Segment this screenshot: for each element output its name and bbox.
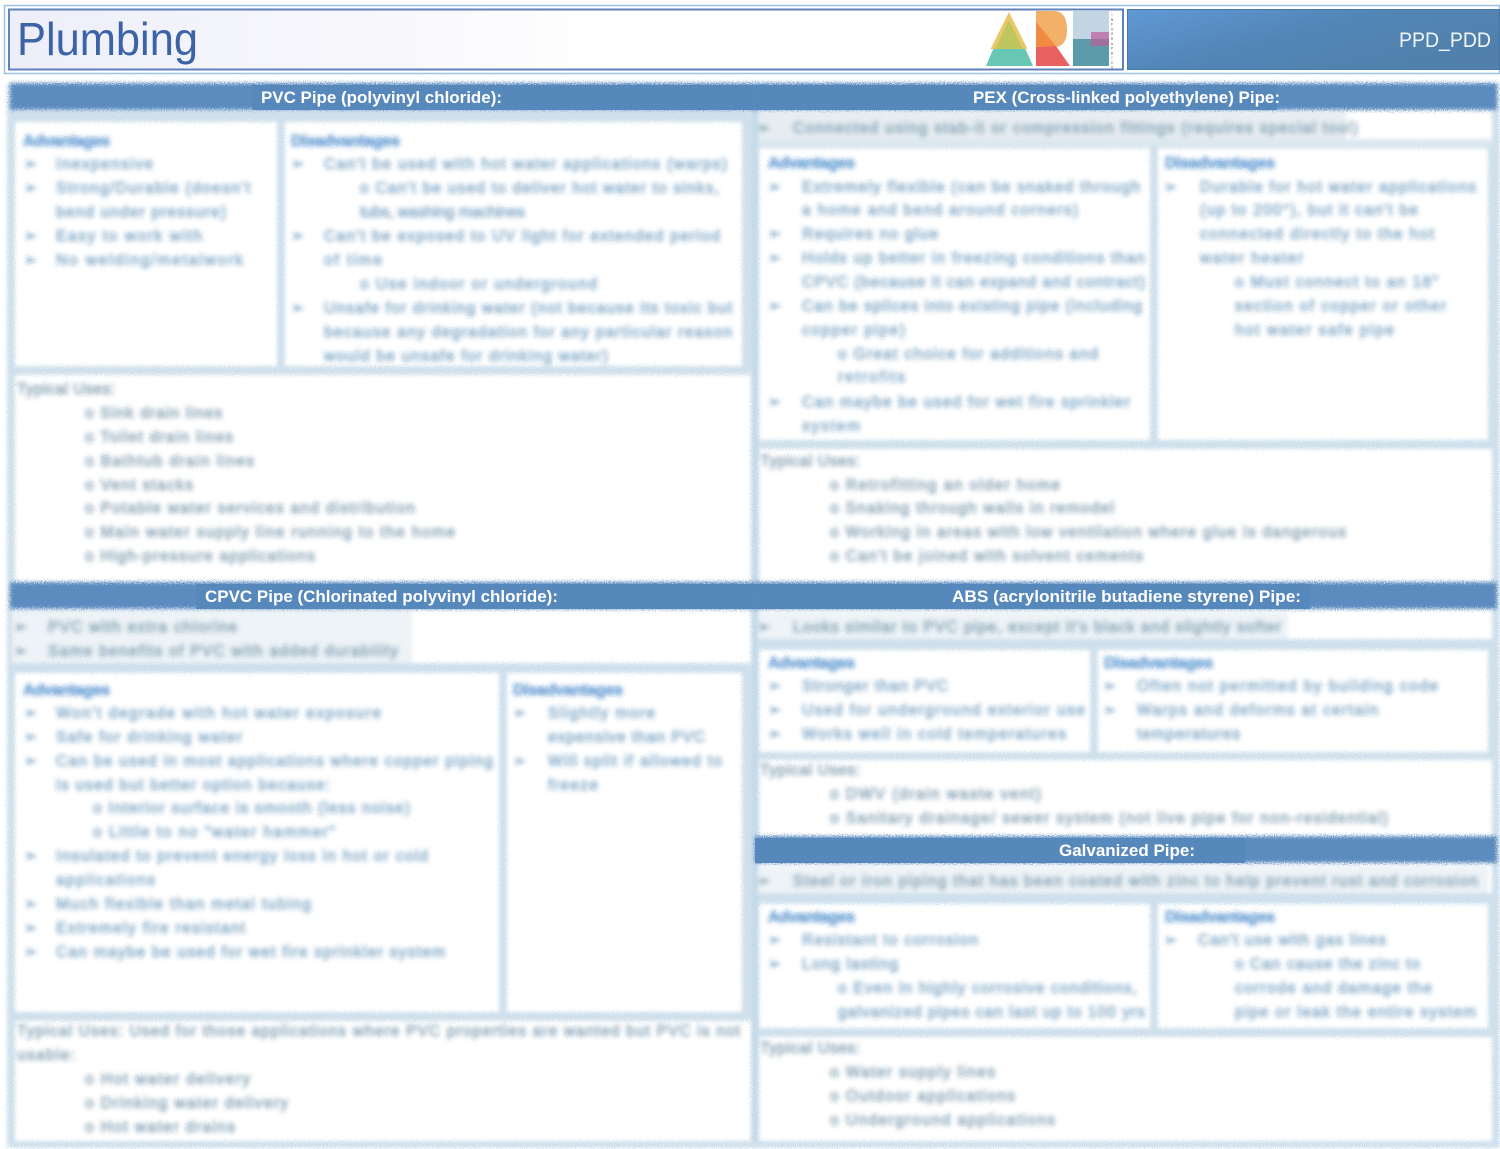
galvanized typical uses: o Water supply lines [830, 1064, 995, 1081]
PVC advantages: ➢ [24, 156, 37, 173]
heading: PEX pipe: PEX (Cross-linked polyethylene) Pipe: [973, 88, 1280, 107]
galvanized advantages: galvanized pipes can last up to 100 yrs [838, 1004, 1145, 1021]
CPVC disadvantages: ➢ [513, 705, 526, 722]
PVC typical uses: o High-pressure applications [85, 548, 315, 565]
CPVC typical uses: usable: [17, 1047, 75, 1064]
PEX disadvantages: Durable for hot water applications [1200, 179, 1476, 196]
CPVC typical uses: o Hot water drains [85, 1119, 235, 1136]
PVC advantages: Easy to work with [56, 228, 202, 245]
PVC advantages: Inexpensive [56, 156, 153, 173]
galvanized typical uses: o Outdoor applications [830, 1088, 1015, 1105]
galvanized disadvantages: Disadvantages [1165, 909, 1275, 926]
panel: PVC pipe [10, 83, 755, 565]
PEX advantages: o Great choice for additions and [838, 346, 1098, 363]
title box: Plumbing [17, 13, 198, 65]
galvanized typical uses: o Underground applications [830, 1112, 1055, 1129]
galvanized advantages: Advantages [768, 909, 855, 926]
PEX advantages: ➢ [768, 179, 781, 196]
PEX advantages: Can maybe be used for wet fire sprinkler [802, 394, 1130, 411]
galvanized disadvantages: ➢ [1164, 932, 1177, 949]
PEX advantages: Holds up better in freezing conditions than [802, 250, 1145, 267]
CPVC advantages: applications [56, 872, 155, 889]
PEX advantages: Advantages [768, 155, 855, 172]
CPVC advantages: ➢ [24, 848, 37, 865]
CPVC intro: ➢ [14, 643, 27, 660]
PVC disadvantages [291, 133, 733, 365]
heading: galvanized pipe: Galvanized Pipe: [1059, 841, 1195, 860]
title box [9, 10, 1123, 70]
PVC advantages: ➢ [24, 180, 37, 197]
ABS intro: ➢ [757, 619, 770, 636]
CPVC advantages: ➢ [24, 896, 37, 913]
PEX intro: Connected using stab-it or compression fittings (requires special tool) [793, 120, 1358, 137]
PEX advantages: ➢ [768, 394, 781, 411]
panel: PEX pipe [755, 83, 1497, 565]
PVC disadvantages: o Can't be used to deliver hot water to sinks, [360, 180, 719, 197]
CPVC intro: Same benefits of PVC with added durability [48, 643, 398, 660]
galvanized disadvantages [1164, 909, 1476, 1021]
ABS advantages [768, 655, 1085, 743]
heading: CPVC pipe [10, 582, 755, 609]
PVC advantages: ➢ [24, 252, 37, 269]
page header [4, 6, 1500, 74]
PVC advantages: Advantages [23, 133, 110, 150]
category box [1128, 10, 1500, 70]
ABS advantages: ➢ [768, 726, 781, 743]
galvanized advantages: Resistant to corrosion [802, 932, 978, 949]
CPVC advantages: Extremely fire resistant [56, 920, 246, 937]
galvanized typical uses [760, 1040, 1055, 1129]
heading: PVC pipe: PVC Pipe (polyvinyl chloride): [261, 88, 502, 107]
ABS advantages: ➢ [768, 702, 781, 719]
PVC disadvantages: Unsafe for drinking water (not because its toxic but [324, 300, 733, 317]
PEX disadvantages: hot water safe pipe [1235, 322, 1394, 339]
PVC advantages [23, 133, 251, 269]
logo: INFOGRAPHICS [1110, 13, 1114, 71]
PEX typical uses: o Working in areas with low ventilation where glue is dangerous [830, 524, 1346, 541]
PVC advantages: bend under pressure) [56, 204, 226, 221]
heading: galvanized pipe [755, 836, 1497, 863]
galvanized advantages: ➢ [768, 956, 781, 973]
PEX disadvantages: ➢ [1164, 179, 1177, 196]
CPVC advantages: Safe for drinking water [56, 729, 242, 746]
CPVC advantages: ➢ [24, 920, 37, 937]
galvanized advantages [768, 909, 1145, 1021]
PEX typical uses: Typical Uses: [760, 453, 860, 470]
PVC typical uses: o Vent stacks [85, 477, 193, 494]
ABS disadvantages [1103, 655, 1438, 743]
PEX disadvantages: o Must connect to an 18" [1235, 274, 1438, 291]
PEX advantages: retrofits [838, 369, 905, 386]
CPVC advantages: o Interior surface is smooth (less noise) [93, 800, 410, 817]
heading: PEX pipe [755, 83, 1497, 110]
CPVC disadvantages: Slightly more [548, 705, 655, 722]
PEX advantages: a home and bend around corners) [802, 202, 1078, 219]
CPVC advantages: Won't degrade with hot water exposure [56, 705, 381, 722]
heading: PVC pipe [10, 83, 755, 110]
PEX intro: ➢ [757, 120, 770, 137]
PEX advantages: Requires no glue [802, 226, 938, 243]
CPVC typical uses [17, 1023, 741, 1136]
PVC advantages: Strong/Durable (doesn't [56, 180, 251, 197]
PEX disadvantages: Disadvantages [1165, 155, 1275, 172]
PEX advantages: Extremely flexible (can be snaked through [802, 179, 1140, 196]
CPVC disadvantages [513, 682, 722, 794]
PVC disadvantages: Can't be used with hot water applications (warps) [324, 156, 727, 173]
CPVC advantages: ➢ [24, 705, 37, 722]
PEX typical uses: o Snaking through walls in remodel [830, 500, 1114, 517]
CPVC advantages: ➢ [24, 753, 37, 770]
galvanized disadvantages: pipe or leak the entire system [1235, 1004, 1476, 1021]
ABS typical uses: o Sanitary drainage/ sewer system (not live pipe for non-residential) [830, 810, 1388, 827]
PEX typical uses [760, 453, 1346, 565]
PEX disadvantages: connected directly to the hot [1200, 226, 1435, 243]
CPVC advantages: Insulated to prevent energy loss in hot or cold [56, 848, 428, 865]
CPVC advantages: ➢ [24, 729, 37, 746]
galvanized advantages: Long lasting [802, 956, 898, 973]
PVC disadvantages: Disadvantages [291, 133, 400, 150]
CPVC advantages: Can maybe be used for wet fire sprinkler system [56, 944, 445, 961]
panel: galvanized pipe [755, 836, 1497, 1129]
PVC typical uses: o Main water supply line running to the home [85, 524, 455, 541]
ABS typical uses: Typical Uses: [760, 762, 860, 779]
ABS intro: Looks similar to PVC pipe, except it's black and slightly softer [793, 619, 1281, 636]
PEX disadvantages [1164, 155, 1476, 339]
CPVC advantages: Much flexible than metal tubing [56, 896, 311, 913]
ABS typical uses: o DWV (drain waste vent) [830, 786, 1041, 803]
PEX advantages: ➢ [768, 298, 781, 315]
PVC typical uses: o Sink drain lines [85, 405, 222, 422]
panel: ABS pipe [755, 582, 1497, 827]
CPVC typical uses: Typical Uses: Used for those applications where PVC properties are wanted but PVC is not [17, 1023, 741, 1040]
galvanized disadvantages: o Can cause the zinc to [1235, 956, 1420, 973]
CPVC disadvantages: Will split if allowed to [548, 753, 722, 770]
galvanized intro: ➢ [757, 873, 770, 890]
CPVC typical uses: o Hot water delivery [85, 1071, 250, 1088]
ABS typical uses [760, 762, 1388, 827]
PEX advantages [768, 155, 1145, 435]
PVC typical uses: Typical Uses: [17, 381, 115, 398]
CPVC advantages: ➢ [24, 944, 37, 961]
galvanized advantages: o Even in highly corrosive conditions, [838, 980, 1137, 997]
CPVC advantages: o Little to no "water hammer" [93, 824, 335, 841]
ABS disadvantages: ➢ [1103, 678, 1116, 695]
ABS disadvantages: Often not permitted by building code [1137, 678, 1438, 695]
PEX disadvantages: water heater [1199, 250, 1303, 267]
PEX advantages: CPVC (because it can expand and contract) [802, 274, 1145, 291]
galvanized intro: Steel or iron piping that has been coated with zinc to help prevent rust and corrosion [793, 873, 1478, 890]
ABS advantages: ➢ [768, 678, 781, 695]
PVC disadvantages: ➢ [291, 228, 304, 245]
CPVC intro [14, 619, 398, 660]
PEX advantages: copper pipe) [802, 322, 905, 339]
PEX typical uses: o Can't be joined with solvent cements [830, 548, 1143, 565]
CPVC intro: PVC with extra chlorine [48, 619, 237, 636]
category box: PPD_PDD [1399, 29, 1491, 52]
PVC disadvantages: ➢ [291, 156, 304, 173]
PVC advantages: No welding/metalwork [56, 252, 243, 269]
CPVC disadvantages: ➢ [513, 753, 526, 770]
ABS advantages: Used for underground exterior use [802, 702, 1085, 719]
CPVC advantages [23, 682, 493, 961]
CPVC typical uses: o Drinking water delivery [85, 1095, 288, 1112]
PVC disadvantages: of time [324, 252, 382, 269]
PEX disadvantages: section of copper or other [1235, 298, 1446, 315]
heading: ABS pipe: ABS (acrylonitrile butadiene styrene) Pipe: [952, 587, 1301, 606]
PEX disadvantages: (up to 200°), but it can't be [1200, 202, 1418, 219]
PVC disadvantages: tubs, washing machines [360, 204, 525, 221]
PEX advantages: Can be splices into existing pipe (including [802, 298, 1142, 315]
galvanized advantages: ➢ [768, 932, 781, 949]
PVC typical uses: o Potable water services and distribution [85, 500, 415, 517]
PVC typical uses: o Toilet drain lines [85, 429, 233, 446]
ABS disadvantages: Disadvantages [1104, 655, 1213, 672]
PVC advantages: ➢ [24, 228, 37, 245]
PVC disadvantages: would be unsafe for drinking water) [323, 348, 608, 365]
PEX advantages: ➢ [768, 250, 781, 267]
ABS disadvantages: temperatures [1137, 726, 1240, 743]
ABS disadvantages: ➢ [1103, 702, 1116, 719]
PEX advantages: system [802, 418, 860, 435]
PEX typical uses: o Retrofitting an older home [830, 477, 1060, 494]
galvanized disadvantages: corrode and damage the [1235, 980, 1432, 997]
CPVC intro: ➢ [14, 619, 27, 636]
CPVC advantages: Can be used in most applications where copper piping [56, 753, 493, 770]
PVC disadvantages: ➢ [291, 300, 304, 317]
CPVC disadvantages: expensive than PVC [548, 729, 705, 746]
CPVC advantages: Advantages [23, 682, 110, 699]
galvanized disadvantages: Can't use with gas lines [1198, 932, 1386, 949]
ABS advantages: Works well in cold temperatures [802, 726, 1066, 743]
heading: ABS pipe [755, 582, 1497, 609]
PVC typical uses: o Bathtub drain lines [85, 453, 254, 470]
heading: CPVC pipe: CPVC Pipe (Chlorinated polyvinyl chloride): [205, 587, 558, 606]
PVC disadvantages: Can't be exposed to UV light for extended period [324, 228, 720, 245]
ABS advantages: Advantages [768, 655, 855, 672]
CPVC disadvantages: Disadvantages [513, 682, 623, 699]
PVC typical uses [17, 381, 455, 565]
PEX advantages: ➢ [768, 226, 781, 243]
CPVC disadvantages: freeze [548, 777, 598, 794]
ABS advantages: Stronger than PVC [802, 678, 948, 695]
panel: CPVC pipe [10, 582, 755, 1136]
galvanized typical uses: Typical Uses: [760, 1040, 860, 1057]
PVC disadvantages: o Use indoor or underground [360, 276, 597, 293]
ABS disadvantages: Warps and deforms at certain [1137, 702, 1378, 719]
PVC disadvantages: because any degradation for any particular reason [324, 324, 732, 341]
CPVC advantages: is used but better option because: [56, 777, 330, 794]
logo [986, 11, 1114, 71]
